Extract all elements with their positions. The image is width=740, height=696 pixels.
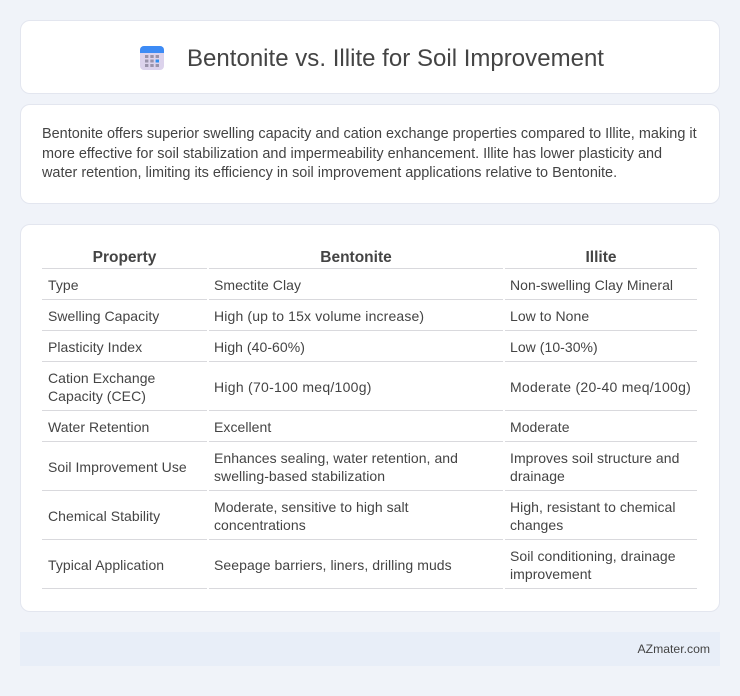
row: Water Retention: Excellent [214, 419, 271, 435]
footer credit: AZmater.com [638, 642, 710, 656]
row: Plasticity Index [48, 339, 598, 355]
summary text: Bentonite offers superior swelling capacity and cation exchange properties compared to Illite, making it [42, 126, 697, 142]
row: Plasticity Index: Plasticity Index [48, 339, 142, 355]
row: Typical Application: Soil conditioning, drainage [510, 548, 676, 564]
row: Swelling Capacity: Low to None [510, 308, 589, 324]
row: Cation Exchange Capacity: Moderate (20-40 meq/100g) [510, 379, 691, 395]
row: Soil Improvement Use [48, 450, 679, 484]
row: Cation Exchange Capacity [48, 370, 691, 404]
row: Type: Smectite Clay [214, 277, 301, 293]
row: Cation Exchange Capacity: Cation Exchange [48, 370, 155, 386]
row: Type: Type [48, 277, 79, 293]
row: Water Retention: Water Retention [48, 419, 149, 435]
row: Typical Application: improvement [510, 566, 591, 582]
summary text: water retention, limiting its efficiency in soil improvement applications relative to Bentonite. [42, 165, 617, 181]
row: Swelling Capacity: High (up to 15x volume increase) [214, 308, 424, 324]
row: Swelling Capacity [48, 308, 589, 324]
row: Plasticity Index: High (40-60%) [214, 339, 305, 355]
column heading: Bentonite: Bentonite [320, 249, 392, 266]
row: Cation Exchange Capacity: Capacity (CEC) [48, 388, 146, 404]
row: Soil Improvement Use: swelling-based stabilization [214, 468, 385, 484]
row: Chemical Stability: Moderate, sensitive to high salt [214, 499, 409, 515]
row: Type: Non-swelling Clay Mineral [510, 277, 673, 293]
panel: comparison table [20, 224, 720, 612]
row: Water Retention [48, 419, 570, 435]
row: Soil Improvement Use: Soil Improvement Use [48, 459, 187, 475]
row: Plasticity Index: Low (10-30%) [510, 339, 598, 355]
column heading: Illite: Illite [585, 249, 616, 266]
row: Chemical Stability: Chemical Stability [48, 508, 160, 524]
footer bar [20, 632, 720, 666]
row: Chemical Stability: High, resistant to chemical [510, 499, 676, 515]
row: Typical Application [48, 548, 676, 582]
column heading: Property: Property [93, 249, 156, 266]
summary text [42, 126, 697, 181]
row: Type [48, 277, 673, 293]
row: Chemical Stability: concentrations [214, 517, 306, 533]
row: Swelling Capacity: Swelling Capacity [48, 308, 159, 324]
row: Chemical Stability: changes [510, 517, 563, 533]
row: Soil Improvement Use: Enhances sealing, water retention, and [214, 450, 458, 466]
title: Bentonite vs. Illite for Soil Improvement [187, 45, 604, 72]
summary panel [20, 104, 720, 204]
icon: calendar [140, 46, 164, 70]
row: Chemical Stability [48, 499, 676, 533]
row: Typical Application: Typical Application [48, 557, 164, 573]
header panel [20, 20, 720, 94]
row: Soil Improvement Use: Improves soil structure and [510, 450, 679, 466]
row: Soil Improvement Use: drainage [510, 468, 565, 484]
row: Cation Exchange Capacity: High (70-100 meq/100g) [214, 379, 372, 395]
row: Water Retention: Moderate [510, 419, 570, 435]
summary text: more effective for soil stabilization and impermeability enhancement. Illite has lower plasticity and [42, 146, 662, 162]
row: Typical Application: Seepage barriers, liners, drilling muds [214, 557, 452, 573]
